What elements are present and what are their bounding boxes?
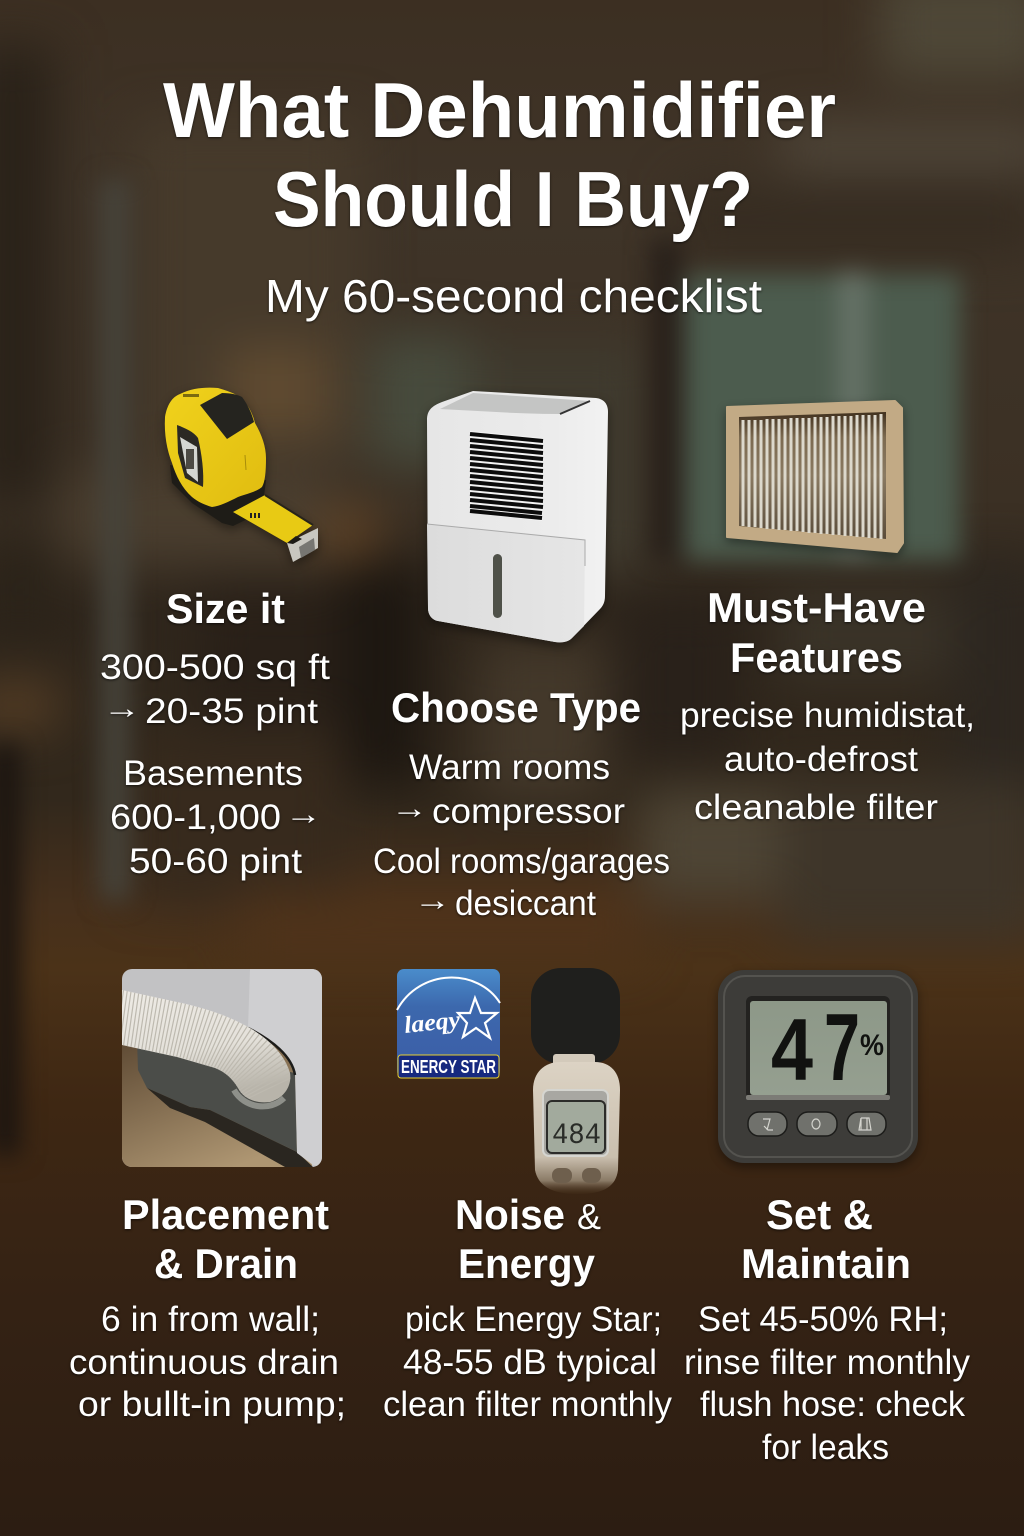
panel: choose type: compressor: [432, 792, 625, 831]
panel: set and maintain: Set &: [766, 1191, 873, 1238]
panel: must-have features: cleanable filter: [694, 788, 938, 827]
panel: must-have features: Features: [730, 634, 903, 681]
panel: noise and energy: clean filter monthly: [383, 1385, 672, 1424]
panel: size it: →: [285, 798, 322, 831]
panel: choose type: →: [391, 792, 428, 825]
panel: size it: 20-35 pint: [145, 692, 318, 731]
icon: digital hygrometer: %: [860, 1029, 884, 1062]
panel: size it: 300-500 sq ft: [100, 648, 330, 687]
icon: energy star badge: ENERCY STAR: [401, 1057, 496, 1077]
title: [163, 66, 836, 243]
panel: set and maintain: flush hose: check: [700, 1385, 965, 1424]
panel: placement and drain: [69, 1191, 346, 1424]
panel: size it: [100, 585, 330, 881]
icon: digital hygrometer: 7: [824, 994, 860, 1101]
panel: size it: →: [103, 692, 141, 725]
panel: set and maintain: Set 45-50% RH;: [698, 1300, 948, 1339]
panel: size it: 50-60 pint: [129, 842, 302, 881]
panel: size it: 600-1,000: [110, 798, 281, 837]
panel: noise and energy: Energy: [458, 1240, 596, 1287]
icon: pleated filter: [727, 401, 903, 552]
panel: must-have features: Must-Have: [707, 584, 926, 631]
panel: noise and energy: pick Energy Star;: [405, 1300, 662, 1339]
panel: set and maintain: for leaks: [762, 1428, 889, 1467]
panel: placement and drain: continuous drain: [69, 1343, 339, 1382]
title: What Dehumidifier: [163, 66, 836, 154]
panel: set and maintain: rinse filter monthly: [684, 1343, 971, 1382]
panel: must-have features: auto-defrost: [724, 740, 918, 779]
panel: set and maintain: Maintain: [741, 1240, 911, 1287]
icon: drain hose photo: [100, 969, 322, 1167]
panel: placement and drain: 6 in from wall;: [101, 1300, 320, 1339]
icon: tape measure: [165, 388, 318, 562]
panel: placement and drain: & Drain: [154, 1240, 298, 1287]
subtitle: My 60-second checklist: [265, 270, 762, 322]
icon: dehumidifier: [427, 391, 608, 642]
panel: placement and drain: or bullt-in pump;: [78, 1385, 346, 1424]
panel: noise and energy: Noise: [455, 1191, 565, 1238]
panel: size it: Size it: [166, 585, 285, 632]
icon: sound level meter: [531, 968, 620, 1194]
panel: choose type: →: [414, 884, 451, 917]
panel: size it: Basements: [123, 754, 303, 793]
icon: sound level meter: 484: [552, 1119, 601, 1153]
icon: energy star badge: laeqy: [403, 1007, 462, 1039]
panel: noise and energy: [383, 1191, 672, 1424]
panel: set and maintain: [684, 1191, 971, 1467]
panel: choose type: desiccant: [455, 884, 596, 923]
panel: choose type: Warm rooms: [409, 748, 610, 787]
icon: digital hygrometer: 4: [771, 1000, 813, 1099]
title: Should I Buy?: [273, 155, 753, 243]
panel: choose type: Cool rooms/garages: [373, 842, 670, 881]
panel: placement and drain: Placement: [122, 1191, 329, 1238]
panel: noise and energy: &: [577, 1196, 601, 1237]
panel: noise and energy: 48-55 dB typical: [403, 1343, 657, 1382]
icon: energy star badge: [397, 969, 500, 1078]
panel: choose type: [373, 684, 670, 923]
panel: must-have features: precise humidistat,: [680, 696, 975, 735]
panel: choose type: Choose Type: [391, 684, 641, 731]
icon: digital hygrometer: [718, 970, 918, 1163]
panel: must-have features: [680, 584, 975, 827]
